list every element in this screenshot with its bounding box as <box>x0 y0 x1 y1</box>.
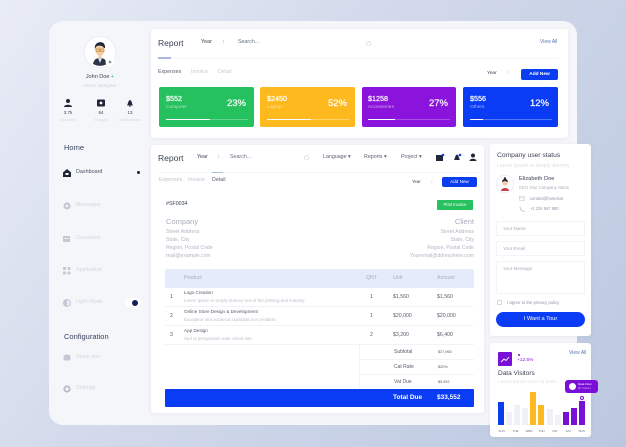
stat card: accessories: 27% <box>429 98 448 108</box>
button: add new <box>442 177 477 187</box>
row 3: 2 <box>370 332 373 338</box>
profile stat: images <box>94 100 108 122</box>
tabs: Expenses <box>158 69 181 75</box>
search field: Search... <box>230 154 251 160</box>
nav: dashboard <box>63 169 140 177</box>
table header: Amount <box>437 275 455 281</box>
company address: mail@example.com <box>166 252 211 258</box>
input: email: Your Email <box>503 246 525 251</box>
total due bar: $33,552 <box>437 394 460 401</box>
cat rate row: Cat Rate <box>394 364 414 370</box>
year select: Year ↕ <box>201 39 225 45</box>
row 2: $20,000 <box>393 313 412 319</box>
name: John Doe + <box>86 74 114 80</box>
button: i want a tour <box>496 312 585 326</box>
nav: application: Application <box>76 267 102 273</box>
subtotal row: $27,960 <box>438 350 452 354</box>
subheading: Lorem Ipsum is simply dummy <box>497 162 570 168</box>
day labels: FRI <box>552 428 557 432</box>
panel: report top <box>151 29 568 138</box>
icon: bell <box>127 100 133 107</box>
icon: image <box>97 100 105 106</box>
chart tooltip: 60 Visitors <box>578 386 591 390</box>
active tab underline <box>212 172 223 173</box>
growth dot <box>518 354 520 356</box>
nav: messages <box>64 202 101 210</box>
button: print invoice: Print Invoice <box>443 202 467 207</box>
day labels: THU <box>538 428 545 432</box>
nav: application <box>63 267 102 274</box>
total due bar <box>165 389 474 407</box>
total due bar: Total Due <box>393 394 422 401</box>
profile stat: followers <box>59 99 77 122</box>
contact phone: +1 234 567 890 <box>530 206 559 211</box>
input: name <box>496 221 585 236</box>
nav: document: Document <box>76 235 101 241</box>
day labels: WED <box>526 428 532 432</box>
icon: mail <box>519 196 524 200</box>
company address: Street Address <box>166 229 199 235</box>
stat card: accessories <box>362 87 456 127</box>
day labels: SUN <box>578 428 585 432</box>
table header: Unit <box>393 275 402 281</box>
button: add new: Add New <box>529 72 550 77</box>
client address: Street Address <box>441 229 474 235</box>
panel: report top: Invoice <box>191 69 208 75</box>
menu: reports: Reports ▾ <box>364 154 387 160</box>
panel: invoice report: Detail <box>212 177 226 183</box>
stat card: computer <box>159 87 254 127</box>
icon: trend badge <box>498 352 512 366</box>
stat card: laptop: 52% <box>328 98 347 108</box>
panel: profile sidebar <box>83 36 117 89</box>
row 2: 2 <box>170 313 173 319</box>
profile stat: notifications: Notifications <box>119 117 141 122</box>
nav: light mode toggle: Light Mode <box>76 299 103 305</box>
input: email <box>496 241 585 256</box>
row 2: 1 <box>370 313 373 319</box>
growth figure: +12.5% <box>517 358 533 363</box>
button: print invoice <box>437 200 473 210</box>
row 2 <box>165 307 474 326</box>
main dashboard panel <box>49 21 577 425</box>
stat card: others: 12% <box>530 98 549 108</box>
client address: Youremail@ddresshere.com <box>410 252 474 258</box>
row 1: Logo Creation <box>184 290 213 295</box>
nav: messages: Messages <box>76 202 101 208</box>
profile stat: followers: 3.7k <box>64 110 72 115</box>
role: UI/UX Designer <box>83 84 117 89</box>
client address: Region, Postal Code <box>427 244 474 250</box>
stat card: others <box>463 87 558 127</box>
nav: light mode toggle <box>63 298 141 307</box>
stat card: others: Others <box>470 105 484 110</box>
stat card: laptop <box>260 87 355 127</box>
icon: phone <box>520 206 524 212</box>
profile stat: notifications: 13 <box>127 110 132 115</box>
nav: settings: Settings <box>76 385 95 391</box>
row 3 <box>165 326 474 345</box>
input: message: Your Message <box>503 266 532 271</box>
day labels: SUN <box>498 428 505 432</box>
button: add new: Add New <box>450 179 469 184</box>
stat card: laptop: Laptop <box>267 105 282 110</box>
row 1: $1,560 <box>437 294 453 300</box>
heading: configuration: Configuration <box>64 332 109 341</box>
chart tooltip <box>565 380 598 393</box>
link: view all: View All <box>569 350 586 356</box>
row 1: $1,560 <box>393 294 409 300</box>
row 2: $20,000 <box>437 313 456 319</box>
row 3: Sed ut perspiciatis unde omnis iste <box>184 336 252 341</box>
heading: Data Visitors <box>498 370 535 376</box>
icon: search <box>366 41 372 46</box>
subtotal row: Subtotal <box>394 349 412 355</box>
vat due row: Vat Due <box>394 379 412 385</box>
input: message <box>496 261 585 294</box>
icon: person <box>470 154 476 161</box>
row 1: 1 <box>170 294 173 300</box>
row 2: Excepteur sint occaecat cupidatat non proident <box>184 317 275 322</box>
table header: Product <box>184 275 202 281</box>
profile stat: images: 64 <box>98 110 104 115</box>
table header <box>165 269 474 288</box>
stat card: computer: $552 <box>166 94 182 103</box>
icon: bell <box>454 154 462 160</box>
stat card: accessories: Accessories <box>368 105 394 110</box>
stat card: others: $556 <box>470 94 486 103</box>
icon: search <box>304 155 310 160</box>
company address: Company <box>166 217 198 226</box>
stat card: laptop: $2450 <box>267 94 287 103</box>
button: i want a tour: I Want a Tour <box>524 316 557 322</box>
stat card: computer: 23% <box>227 98 246 108</box>
profile stat: notifications <box>119 100 141 122</box>
vat due row <box>359 375 474 389</box>
row 3: App Design <box>184 328 208 333</box>
day labels <box>498 428 585 432</box>
nav: document <box>63 235 101 242</box>
icon: person <box>64 99 72 107</box>
table header: QNT <box>366 275 377 281</box>
profile stat: followers: Followers <box>59 117 77 122</box>
invoice table <box>165 269 474 407</box>
vat due row: $5,592 <box>438 380 450 384</box>
row 1: 1 <box>370 294 373 300</box>
row 1: Lorem Ipsum is simply dummy text of the printing and industry <box>184 298 305 303</box>
panel: report top: Detail <box>218 69 232 75</box>
stat card: accessories: $1258 <box>368 94 388 103</box>
row 2: Online Store Design & Development <box>184 309 258 314</box>
nav: stack dev: Stack dev <box>76 354 100 360</box>
icon: avatar <box>84 36 116 68</box>
day labels: SAT <box>566 428 571 432</box>
cat rate row: $20% <box>438 365 448 369</box>
link: view all: View All <box>540 39 557 45</box>
nav: settings <box>64 385 96 392</box>
client address: State, City <box>450 237 474 243</box>
company address <box>166 217 213 258</box>
contact role: CEO Your Company Name <box>519 185 569 190</box>
row 3: $3,200 <box>393 332 409 338</box>
subheading: Lorem Ipsum dolor sit amet <box>498 380 556 385</box>
bar chart <box>498 392 585 432</box>
search field: Search... <box>238 39 259 45</box>
active tab underline <box>158 57 171 58</box>
chart tooltip: Data Flow <box>578 382 592 386</box>
heading: report: Report <box>158 38 184 48</box>
row 1 <box>165 288 474 307</box>
cat rate row <box>359 360 474 375</box>
contact name: Elizabeth Doe <box>519 176 554 182</box>
menu: language: Language ▾ <box>323 154 351 160</box>
client address <box>410 217 474 258</box>
year select: Year ↕ <box>197 154 220 160</box>
privacy text: I agree to the privacy policy <box>507 300 559 304</box>
tabs: Expenses <box>159 177 182 183</box>
company address: State, City <box>166 237 190 243</box>
panel: invoice report: Invoice <box>188 177 205 183</box>
menu: project: Project ▾ <box>401 154 422 160</box>
heading: home: Home <box>64 143 84 152</box>
nav: stack dev <box>64 354 100 360</box>
client address: Client <box>455 217 474 226</box>
privacy checkbox <box>497 300 502 305</box>
chart marker <box>580 396 584 400</box>
subtotal row <box>359 345 474 360</box>
invoice number: #SF0034 <box>166 201 188 207</box>
contact email: contact@homelun. <box>530 196 564 201</box>
row 3: 3 <box>170 332 173 338</box>
heading: Company user status <box>497 152 560 159</box>
row 3: $6,400 <box>437 332 453 338</box>
company address: Region, Postal Code <box>166 244 213 250</box>
button: add new <box>521 69 558 80</box>
stat card: computer: Computer <box>166 105 187 110</box>
panel: data visitors <box>490 343 591 437</box>
icon: image <box>436 154 444 161</box>
heading: report: Report <box>158 153 184 163</box>
year select small: Year ↕ <box>487 71 509 76</box>
year select small: Year ↕ <box>412 179 433 184</box>
panel: company user status <box>490 144 591 336</box>
panel: invoice report <box>151 145 484 413</box>
input: name: Your Name <box>503 226 526 231</box>
nav: dashboard: Dashboard <box>76 169 102 175</box>
profile stat: images: Images <box>94 117 108 122</box>
day labels: TUE <box>512 428 518 432</box>
icon: avatar <box>496 175 514 193</box>
